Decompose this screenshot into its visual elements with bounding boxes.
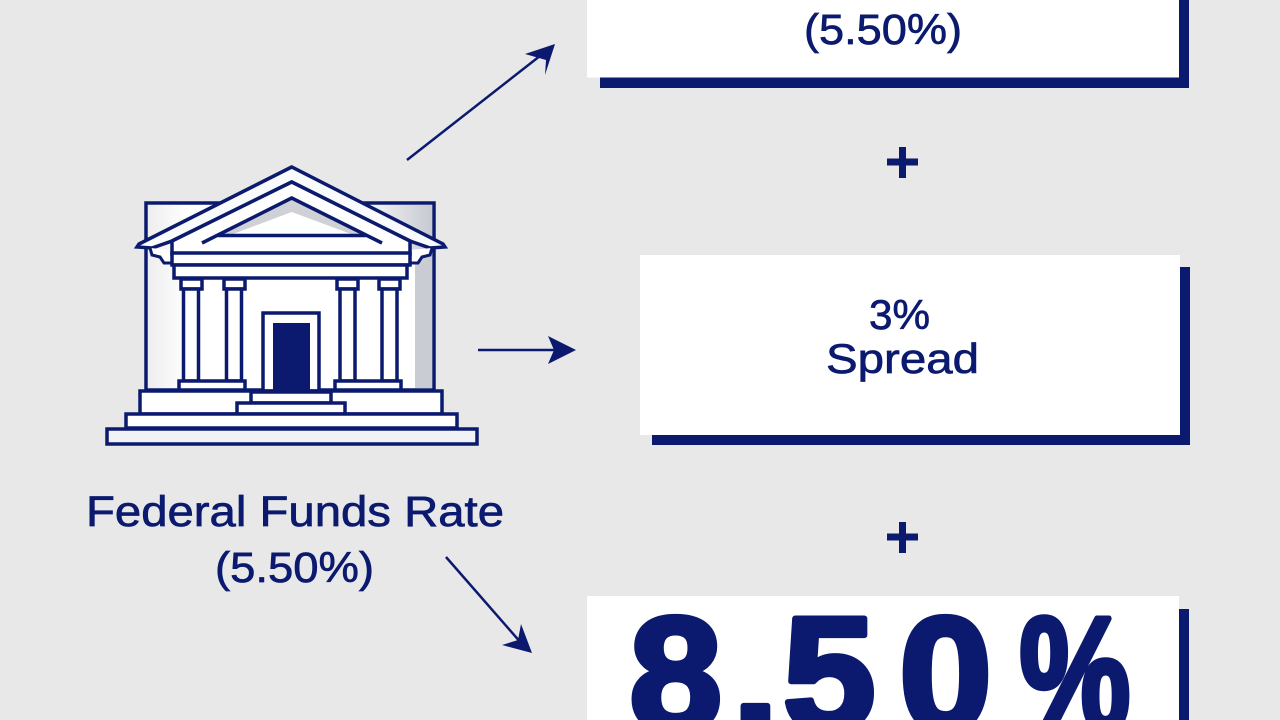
inner roof xyxy=(172,182,410,254)
back wall xyxy=(146,203,434,390)
eave cornice left xyxy=(150,248,173,263)
panel: spread box xyxy=(640,255,1190,445)
arrow: to top box xyxy=(407,44,555,160)
icon: plus sign upper xyxy=(887,147,918,178)
text: federal funds rate value: (5.50%) xyxy=(215,544,374,592)
panel: top result box xyxy=(587,0,1189,90)
entablature xyxy=(172,253,410,278)
icon: bank building xyxy=(107,167,477,444)
eave cornice right xyxy=(409,248,432,263)
text: spread label: Spread xyxy=(826,335,979,382)
arrow: to total box xyxy=(446,557,532,653)
right columns xyxy=(335,279,401,390)
arrow: to spread box xyxy=(478,336,576,364)
panel: total box xyxy=(587,583,1189,720)
heading: federal funds rate label: Federal Funds Rate xyxy=(86,488,504,536)
text: spread value: 3% xyxy=(869,291,930,338)
door xyxy=(263,313,319,391)
heading: federal funds rate label xyxy=(86,488,504,592)
text: top box rate: (5.50%) xyxy=(804,6,962,54)
steps xyxy=(107,391,477,444)
outer roof xyxy=(137,167,445,248)
tympanum xyxy=(202,198,382,243)
icon: plus sign lower xyxy=(887,522,918,553)
left columns xyxy=(179,279,245,390)
